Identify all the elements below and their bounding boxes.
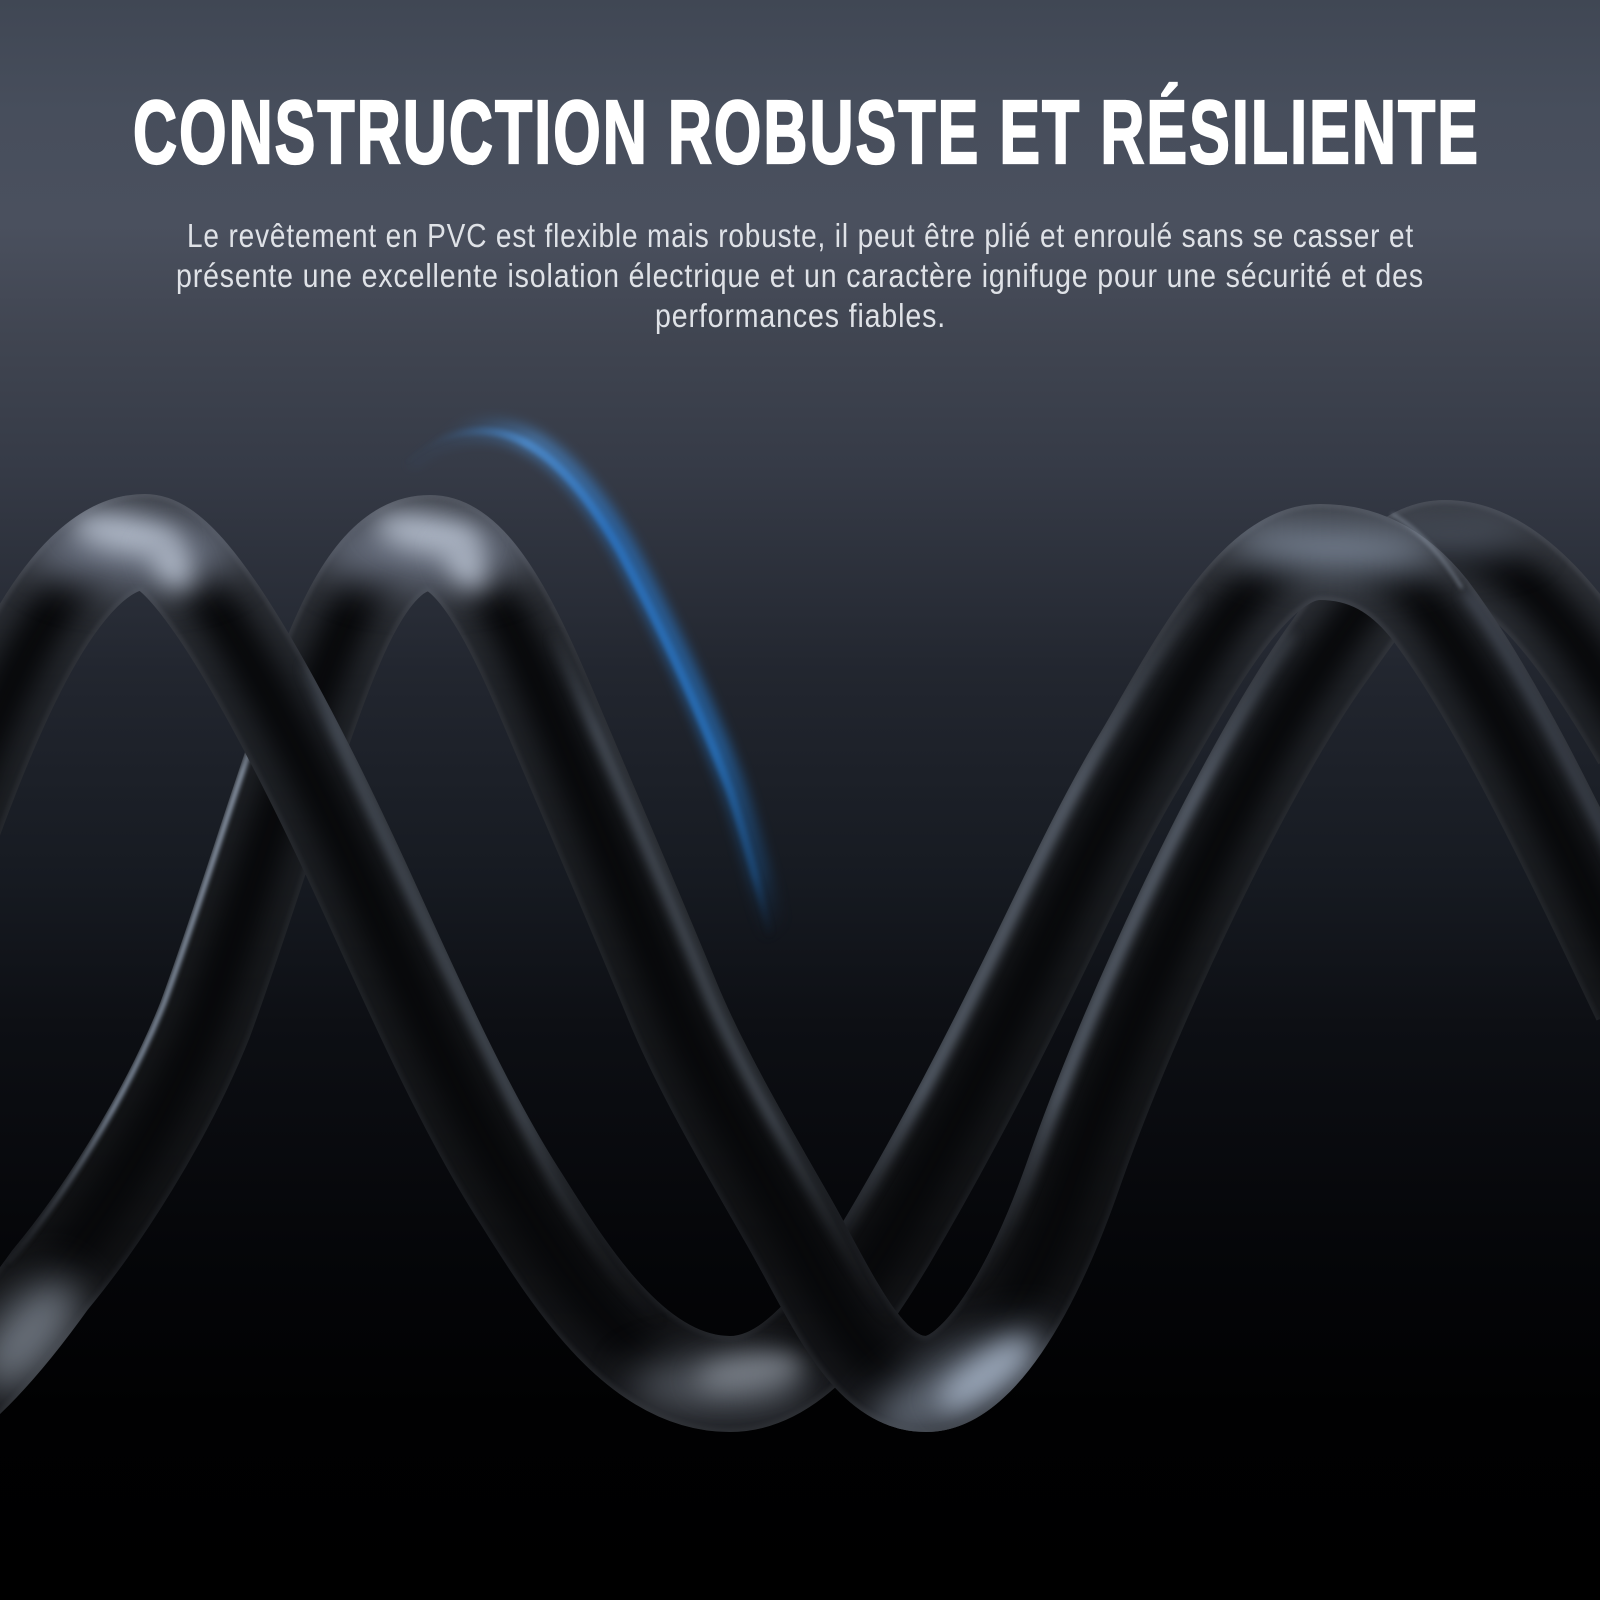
- description text: performances fiables.: [655, 297, 946, 334]
- seam highlight on right peak: [1392, 514, 1462, 588]
- cable: second strand passing over the first at the trough: [783, 1222, 1000, 1432]
- highlight: first trough: [630, 1349, 810, 1415]
- blue motion streak: [408, 429, 774, 933]
- cable: front strand (first peak, troughs, right peak): [0, 507, 1600, 1415]
- highlight: first peak: [30, 507, 240, 597]
- cable: back strand (left rise, second peak, right rise): [0, 507, 1600, 1462]
- description text: Le revêtement en PVC est flexible mais robuste, il peut être plié et enroulé sans se casser et: [187, 217, 1414, 254]
- description text: [176, 217, 1424, 334]
- highlight: right peak: [1229, 517, 1441, 579]
- description text: présente une excellente isolation électrique et un caractère ignifuge pour une sécurité et des: [176, 257, 1424, 294]
